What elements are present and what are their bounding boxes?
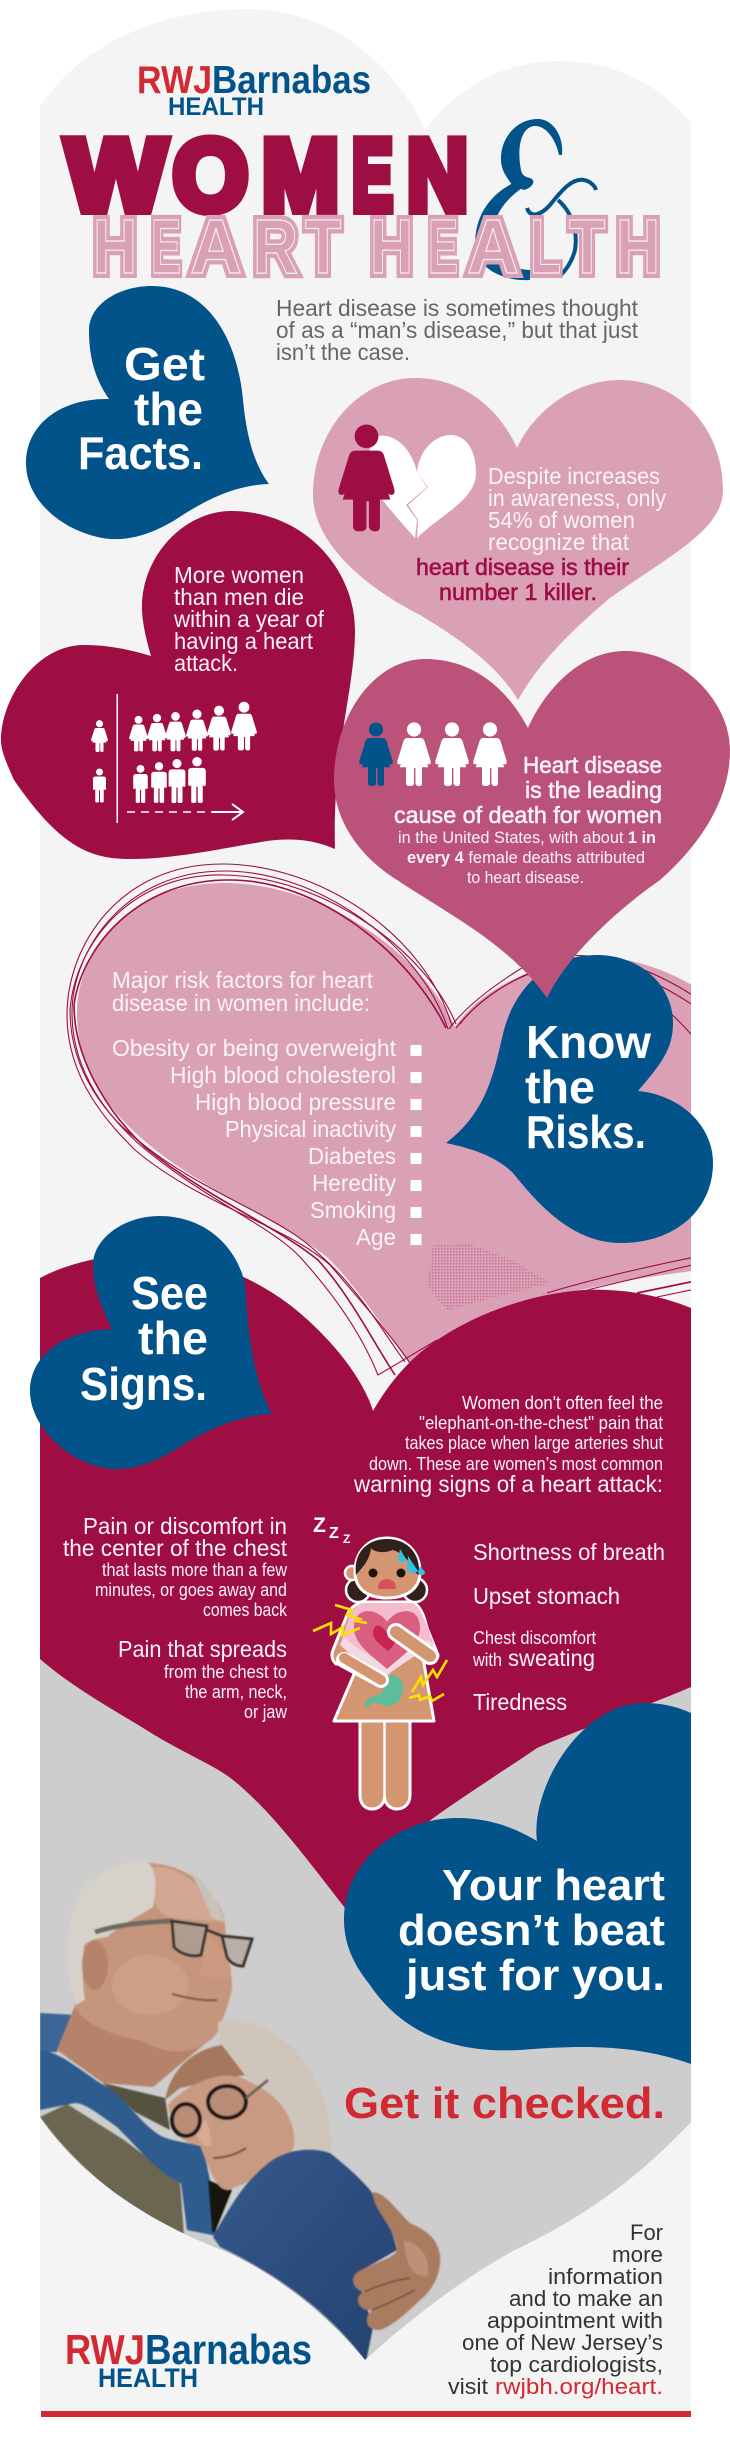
title: HEART HEALTH: E [428,204,458,290]
text: awareness: recognize that [488,529,630,555]
text: die within a year: than men die [174,584,304,610]
text: warning signs intro: Women don't often feel the [462,1393,663,1413]
text: leading cause [394,752,662,887]
text: warning signs left: the arm, neck, [185,1682,287,1702]
panel: get the facts heart: Facts. [78,427,203,479]
photo: embracing couple [40,1860,440,2362]
icon: sick woman figure [313,1514,447,1809]
title: HEART HEALTH: L [530,204,561,290]
title: HEART HEALTH: A [190,204,242,290]
title: HEART HEALTH: E [151,204,181,290]
blue collar behind [40,2013,76,2052]
text: warning signs left: that lasts more than a few [102,1560,288,1580]
title: HEART HEALTH: T [569,204,605,290]
icon: sleep Zs: Z [343,1532,350,1546]
logo: bottom: Barnabas [145,2326,312,2373]
list: risk factors: Physical inactivity [225,1116,396,1142]
text: warning signs left: Pain or discomfort in [83,1513,287,1539]
woman's hair [218,2020,332,2152]
logo: top: HEALTH [168,93,264,121]
list: risk factors: Diabetes [308,1143,396,1169]
title: WOMEN: E [352,120,393,232]
man's hand [353,2192,440,2330]
text: die within a year: More women [174,562,304,588]
text: leading cause: Heart disease [523,752,662,778]
text: number 1 killer: number 1 killer. [439,579,597,605]
title: WOMEN: N [407,120,468,232]
text: die within a year: having a heart [174,628,314,654]
text: warning signs left [63,1513,288,1722]
text: awareness: Despite increases [488,463,660,489]
icon: sleep Zs [313,1514,350,1546]
title: HEART HEALTH: E [151,204,181,290]
list: risk factors: High blood pressure [195,1089,396,1115]
text: warning signs left: comes back [203,1600,288,1620]
title: WOMEN: M [262,120,339,232]
icon: sleep Zs: Z [313,1514,326,1537]
panel: your heart doesn't beat heart [344,1703,691,2064]
panel: your heart doesn't beat heart: just for you. [405,1951,665,2000]
title: HEART HEALTH: T [569,204,605,290]
title: HEART HEALTH: R [253,204,298,290]
title: HEART HEALTH: H [370,204,413,290]
title: HEART HEALTH: H [93,204,137,290]
stipple patch [427,1243,550,1310]
woman's arm [213,2150,397,2362]
logo: top [137,59,371,121]
panel: see the signs heart: the [138,1312,208,1364]
text: number 1 killer [416,554,629,605]
text: warning signs intro: down. These are women’s most common [369,1454,663,1474]
title: HEART HEALTH: E [428,204,458,290]
woman's face [168,2076,294,2190]
text: for more information: visit [448,2374,488,2399]
panel: see the signs heart: Signs. [80,1358,207,1410]
bottom red bar [41,2411,691,2417]
title: HEART HEALTH: T [305,204,341,290]
text: warning signs right: Upset stomach [473,1583,620,1609]
panel: know the risks heart [446,955,713,1243]
panel: get the facts heart: the [134,383,203,435]
man's glasses [95,1921,172,1932]
icon: woman figure [338,424,395,531]
text: warning signs right: Shortness of breath [473,1539,665,1565]
panel: know the risks heart: Know [526,1016,651,1068]
list: risk factors: Heredity [312,1170,396,1196]
title: HEART HEALTH: H [93,204,137,290]
logo: top: Barnabas [212,59,371,102]
panel: know the risks heart: Risks. [526,1106,646,1158]
text: number 1 killer: heart disease is their [416,554,629,580]
text: warning signs left: or jaw [244,1702,288,1722]
man's head [68,1863,232,2052]
text: risk factors intro: disease in women include: [112,990,370,1016]
icon: broken heart [365,435,476,538]
man's cheek [112,1955,188,2015]
title: WOMEN [66,120,468,232]
text: warning signs intro: takes place when large arteries shut [405,1433,663,1453]
list: risk factors: High blood cholesterol [170,1062,396,1088]
text: for more information: top cardiologists, [490,2352,663,2377]
text: risk factors intro [112,971,373,1011]
intro text: Heart disease is sometimes thought [276,295,639,321]
text: warning signs left: from the chest to [164,1662,287,1682]
panel: warning signs heart [40,1253,691,1908]
text: for more information [448,2220,663,2399]
man's ear [82,1940,108,1990]
man's hair [67,1860,155,2005]
title: HEART HEALTH: T [305,204,341,290]
man's neck [57,2003,207,2087]
title: HEART HEALTH: L [530,204,561,290]
intro text: isn’t the case. [276,339,410,365]
text: die within a year: within a year of [173,606,325,632]
callout: get it checked: Get it checked. [344,2079,665,2128]
text: leading cause: to heart disease. [467,868,584,887]
intro text: of as a “man’s disease,” but that just [276,317,639,343]
panel: get the facts heart [26,286,269,539]
title: WOMEN: O [173,120,248,232]
list: risk factors: Smoking [310,1197,396,1223]
text: warning signs intro: "elephant-on-the-chest" pain that [419,1413,663,1433]
panel: see the signs heart [30,1216,272,1469]
icon: pain bolts [313,1605,447,1701]
text: warning signs left: Pain that spreads [118,1636,287,1662]
panel: your heart doesn't beat heart: Your heart [442,1861,665,1910]
text: leading cause: every 4 female deaths attributed [407,848,645,867]
chart: women and men pictogram [91,694,257,823]
dark gap [208,2180,232,2232]
title: HEART HEALTH: A [467,204,519,290]
text: for more information: rwjbh.org/heart. [495,2374,663,2399]
text: warning signs right: sweating [508,1645,595,1671]
title: HEART HEALTH [93,204,660,290]
man's forehead [150,1867,222,1922]
text: for more information: one of New Jersey’s [462,2330,663,2355]
panel: get the facts heart: Get [124,338,205,390]
text: warning signs right [472,1539,665,1715]
text: for more information: appointment with [487,2308,663,2333]
panel: know the risks heart: the [525,1061,595,1113]
text: leading cause: cause of death for women [394,802,662,828]
icon: one in four women [359,722,507,786]
panel: 54 percent heart [313,378,723,700]
title: HEART HEALTH: H [616,204,660,290]
man's shirt [103,2083,170,2130]
background: grey lower heart [40,1500,691,2360]
list: risk factors: Age [356,1224,396,1250]
woman's glasses [208,2086,246,2118]
text: leading cause: is the leading [525,777,662,803]
text: for more information: more [612,2242,663,2267]
text: for more information: For [630,2220,663,2245]
text: warning signs intro [353,1393,663,1497]
title: HEART HEALTH: A [467,204,519,290]
title: WOMEN: W [66,120,167,232]
text: warning signs left: the center of the chest [63,1535,288,1561]
title: HEART HEALTH: A [190,204,242,290]
text: for more information: information [548,2264,663,2289]
text: for more information: and to make an [509,2286,663,2311]
icon: sleep Zs: Z [329,1525,339,1542]
panel: risk factors heart [67,864,700,1375]
title ampersand [475,119,596,280]
text: risk factors intro: Major risk factors for heart [112,967,374,993]
list: risk factors: Obesity or being overweight [112,1035,397,1061]
panel: more women than men heart [1,511,355,859]
title: HEART HEALTH: H [370,204,413,290]
text: leading cause: in the United States, with about 1 in [398,828,656,847]
logo: bottom [65,2326,312,2393]
text: warning signs right: Chest discomfort [473,1628,596,1648]
logo: bottom: RWJ [65,2326,145,2373]
panel: leading cause heart [334,651,730,998]
title: HEART HEALTH: H [616,204,660,290]
text: warning signs right: with [472,1650,502,1670]
text: warning signs left: minutes, or goes away and [95,1580,287,1600]
text: die within a year [173,562,325,676]
text: awareness [488,463,666,555]
text: awareness: 54% of women [488,507,635,533]
panel: your heart doesn't beat heart: doesn’t beat [398,1906,665,1955]
text: awareness: in awareness, only [488,485,666,511]
blue hoodie [40,2050,217,2236]
list: risk factors [112,1035,422,1250]
text: die within a year: attack. [174,650,238,676]
text: warning signs right: Tiredness [473,1689,567,1715]
intro text [276,295,639,365]
panel: see the signs heart: See [131,1267,208,1319]
title: HEART HEALTH: R [253,204,298,290]
man's nose [229,1965,232,1972]
text: warning signs intro: warning signs of a heart attack: [353,1471,663,1497]
logo: bottom: HEALTH [98,2363,198,2393]
logo: top: RWJ [137,59,212,102]
